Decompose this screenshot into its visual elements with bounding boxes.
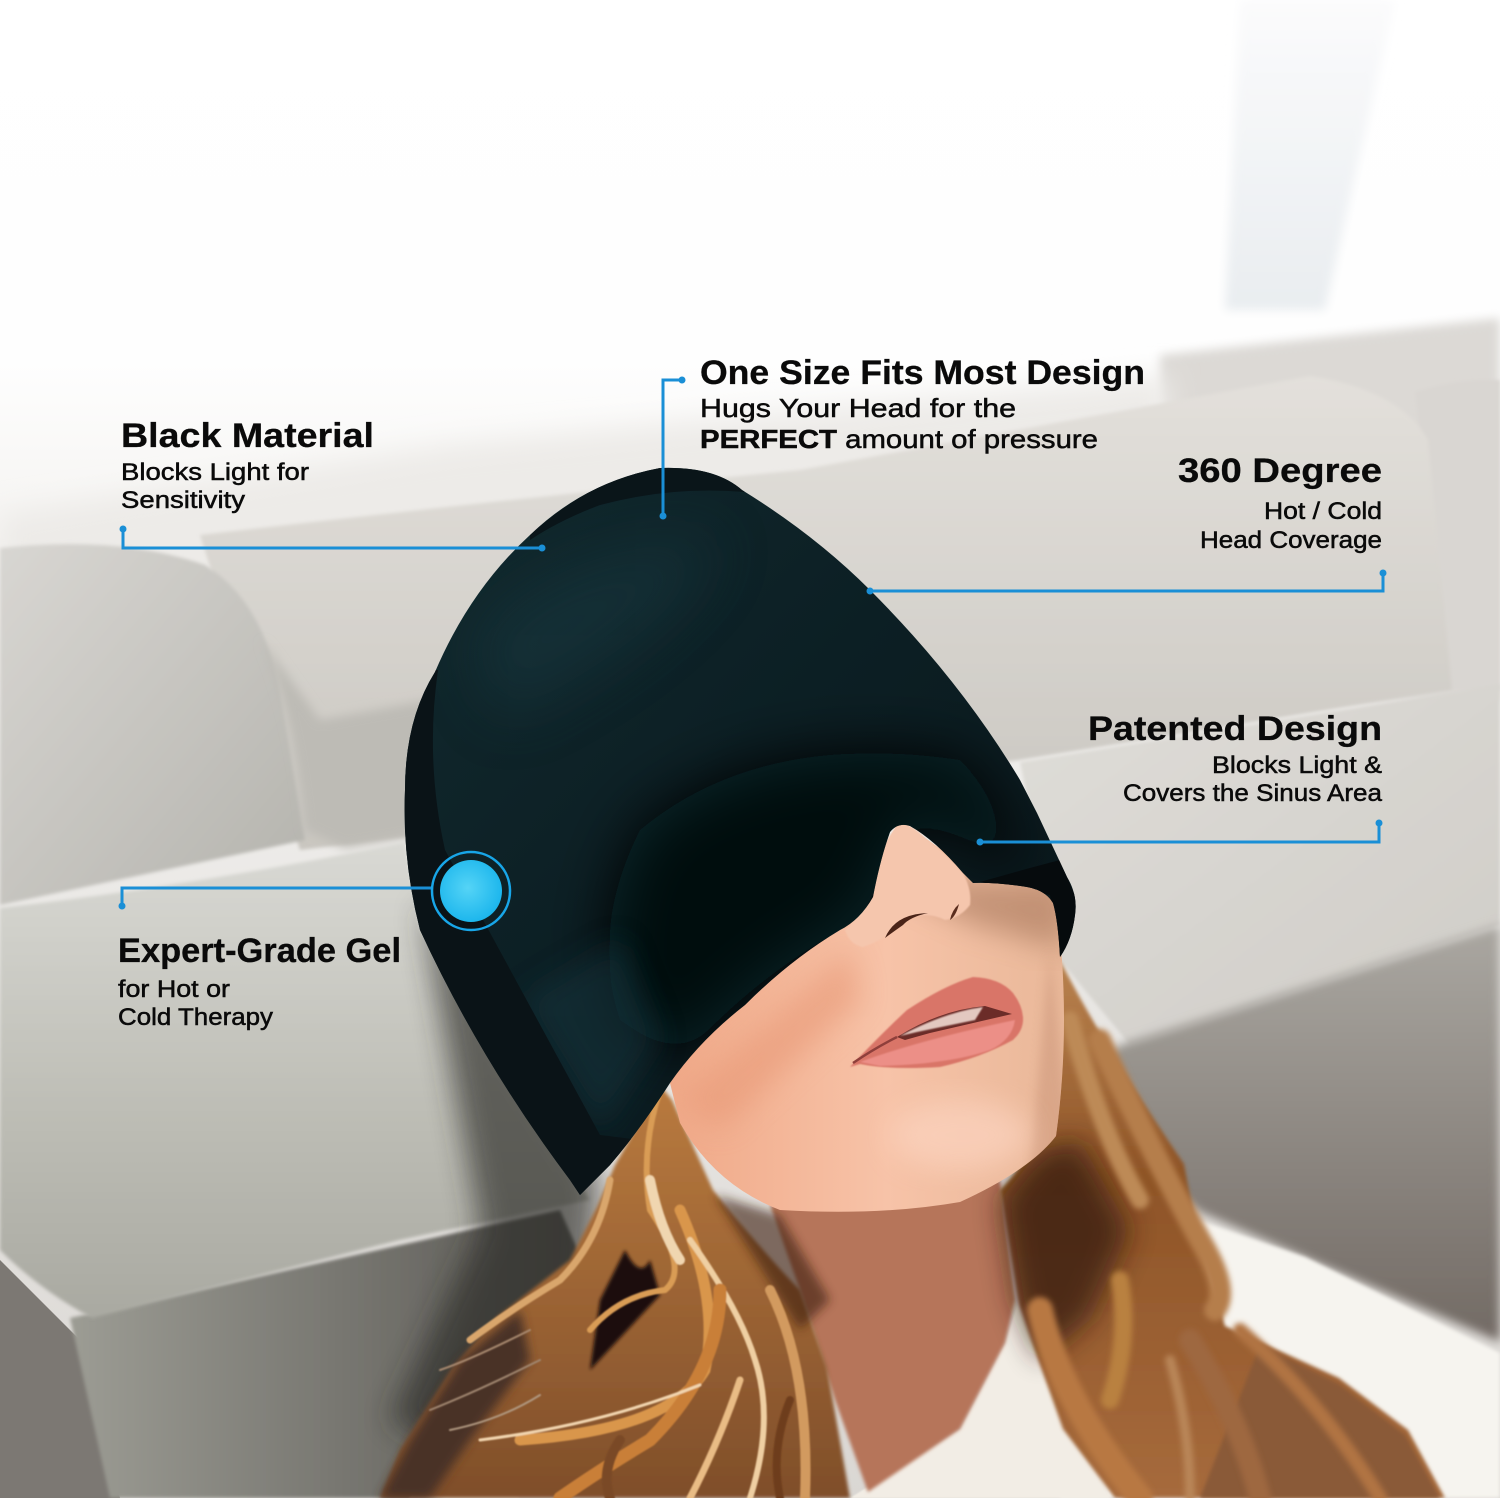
callout: expert-grade gel [118, 932, 401, 1031]
callout: black material: Black Material [121, 417, 374, 455]
woman: hair [380, 960, 1445, 1498]
callout: patented design: Patented Design [1088, 710, 1382, 748]
callout: expert-grade gel: Cold Therapy [118, 1004, 273, 1031]
callout: 360 degree: Head Coverage [1200, 527, 1382, 554]
callout: black material: Sensitivity [121, 487, 245, 514]
callout: 360 degree [1178, 452, 1382, 554]
callout: black material [121, 417, 374, 514]
callout: expert-grade gel: for Hot or [118, 976, 230, 1003]
callout connector lines [118, 376, 1386, 910]
callout: one size fits most: One Size Fits Most Design [700, 354, 1145, 392]
callout: patented design: Blocks Light & [1212, 752, 1382, 779]
icon: gel pack circle [432, 852, 510, 930]
callout: patented design [1088, 710, 1383, 807]
nose [845, 824, 970, 947]
callout: one size fits most: Hugs Your Head for the [700, 393, 1016, 423]
woman: sweater [408, 1219, 1500, 1498]
callout: 360 degree: Hot / Cold [1264, 498, 1382, 525]
callout: one size fits most: PERFECT amount of pressure [700, 424, 1098, 454]
woman: neck [770, 1180, 1015, 1492]
woman: face [670, 820, 1070, 1212]
callout: one size fits most [700, 354, 1145, 454]
gel cap [395, 466, 1085, 1200]
callout: patented design: Covers the Sinus Area [1123, 780, 1383, 807]
callout: expert-grade gel: Expert-Grade Gel [118, 932, 401, 970]
lips [850, 977, 1023, 1068]
callout: 360 degree: 360 Degree [1178, 452, 1382, 490]
callout: black material: Blocks Light for [121, 459, 309, 486]
